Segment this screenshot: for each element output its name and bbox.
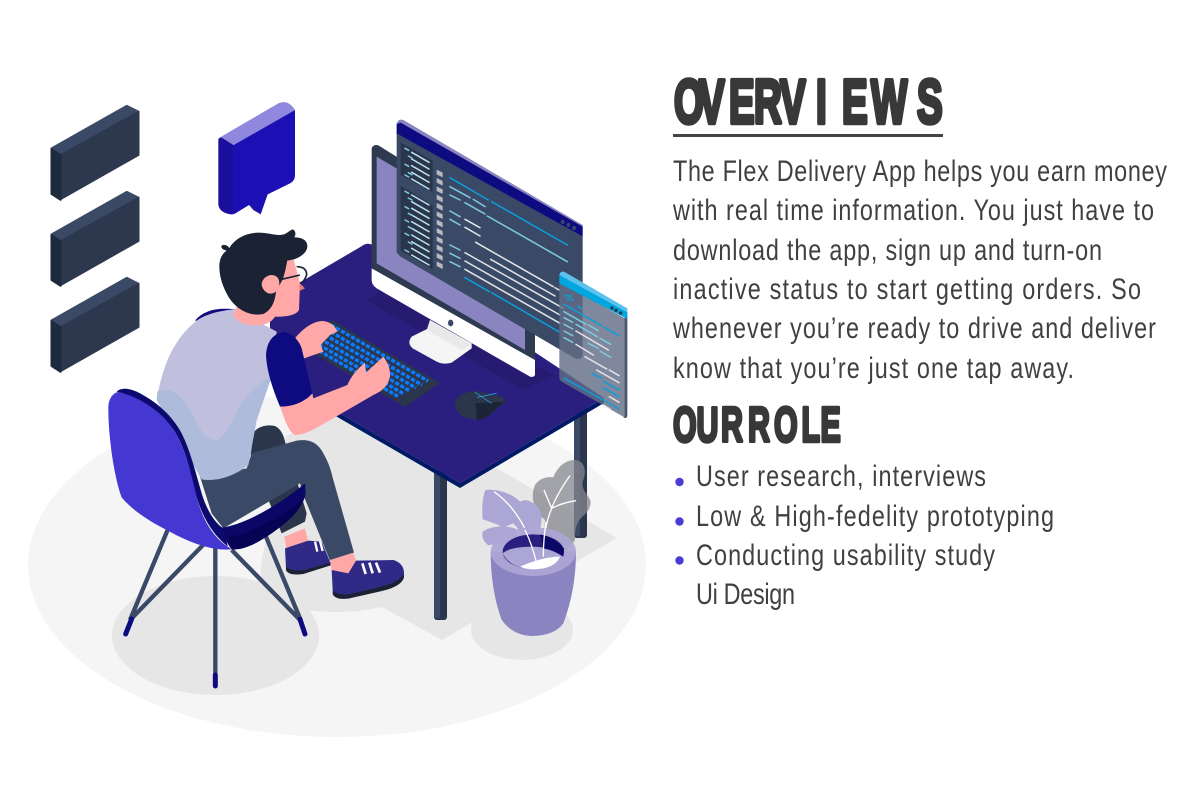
chair edge	[117, 389, 232, 549]
role list: Low & High-fedelity prototyping	[696, 499, 1054, 533]
camera dot	[448, 320, 453, 326]
plant	[482, 460, 591, 563]
mouse	[455, 391, 505, 420]
overview paragraph: whenever you’re ready to drive and deliver	[672, 311, 1156, 345]
role list: Conducting usability study	[696, 538, 995, 572]
icon: three stacked blocks	[51, 106, 139, 372]
overview paragraph: inactive status to start getting orders. So	[673, 272, 1141, 306]
window dots	[610, 306, 622, 315]
desk back leg	[574, 400, 587, 538]
code lines	[450, 178, 567, 332]
desk	[270, 244, 604, 488]
sidebar short lines	[405, 148, 412, 252]
far leg	[251, 425, 307, 533]
monitor screen	[377, 157, 525, 350]
chair seat	[222, 483, 306, 549]
block 2	[51, 192, 139, 286]
chair legs	[126, 528, 305, 686]
sidebars	[401, 142, 433, 269]
leaf veins	[494, 476, 576, 563]
far ankle	[284, 528, 308, 550]
shirt	[157, 309, 277, 480]
sidebar lines	[412, 152, 429, 265]
near arm and hand	[280, 357, 390, 435]
monitor frame	[372, 145, 535, 360]
text column	[672, 67, 1167, 611]
overview paragraph: The Flex Delivery App helps you earn money	[673, 154, 1167, 188]
keys	[304, 325, 428, 397]
near leg	[200, 440, 354, 561]
role bullets	[675, 478, 684, 565]
keyboard	[297, 320, 440, 407]
heading: overviews: OVERVIEWS	[674, 67, 943, 136]
near ankle	[330, 553, 357, 574]
floor ellipse	[28, 393, 646, 737]
light leaf	[482, 490, 542, 563]
overview paragraph: download the app, sign up and turn-on	[673, 233, 1102, 267]
ear	[262, 275, 279, 294]
desk shadow	[261, 405, 617, 640]
monitor	[367, 145, 555, 390]
leg tips	[126, 619, 305, 686]
role list: User research, interviews	[696, 459, 986, 493]
main code window	[397, 120, 583, 359]
heading rule	[673, 134, 943, 137]
near shoe	[332, 560, 404, 599]
stand	[409, 320, 472, 364]
dark leaf	[533, 460, 591, 563]
chair shell	[108, 392, 232, 550]
chair	[108, 389, 306, 550]
code tag dots	[578, 307, 582, 308]
heading: our role: OUR ROLE	[673, 397, 841, 452]
far arm	[295, 321, 337, 358]
chair shadow	[112, 576, 319, 695]
face	[250, 258, 300, 317]
overview paragraph	[672, 154, 1167, 385]
floating code window	[559, 272, 627, 418]
pot shadow	[471, 600, 573, 660]
hair	[219, 229, 307, 315]
glasses	[282, 267, 307, 283]
line-number squares	[437, 170, 443, 269]
code tag: </>	[564, 290, 575, 308]
sleeve	[266, 332, 312, 407]
icon: speech bubble	[218, 102, 295, 214]
block 1	[51, 106, 139, 200]
window dots	[561, 220, 576, 230]
neck	[233, 300, 275, 325]
desk front leg	[434, 470, 447, 620]
shirt lower shade	[157, 377, 272, 480]
block 3	[51, 278, 139, 372]
role list: Ui Design	[696, 577, 795, 611]
monitor chin	[372, 268, 535, 377]
monitor shadow on desk	[367, 292, 555, 390]
overview paragraph: with real time information. You just have to	[672, 193, 1154, 227]
chair seat lower shade	[228, 498, 304, 549]
floating code lines	[564, 304, 619, 409]
person	[157, 229, 404, 599]
role list	[696, 459, 1054, 611]
plant pot	[491, 522, 576, 636]
nose	[299, 283, 305, 291]
overview paragraph: know that you’re just one tap away.	[673, 351, 1074, 385]
shoulder	[195, 309, 240, 323]
far shoe	[285, 541, 331, 574]
